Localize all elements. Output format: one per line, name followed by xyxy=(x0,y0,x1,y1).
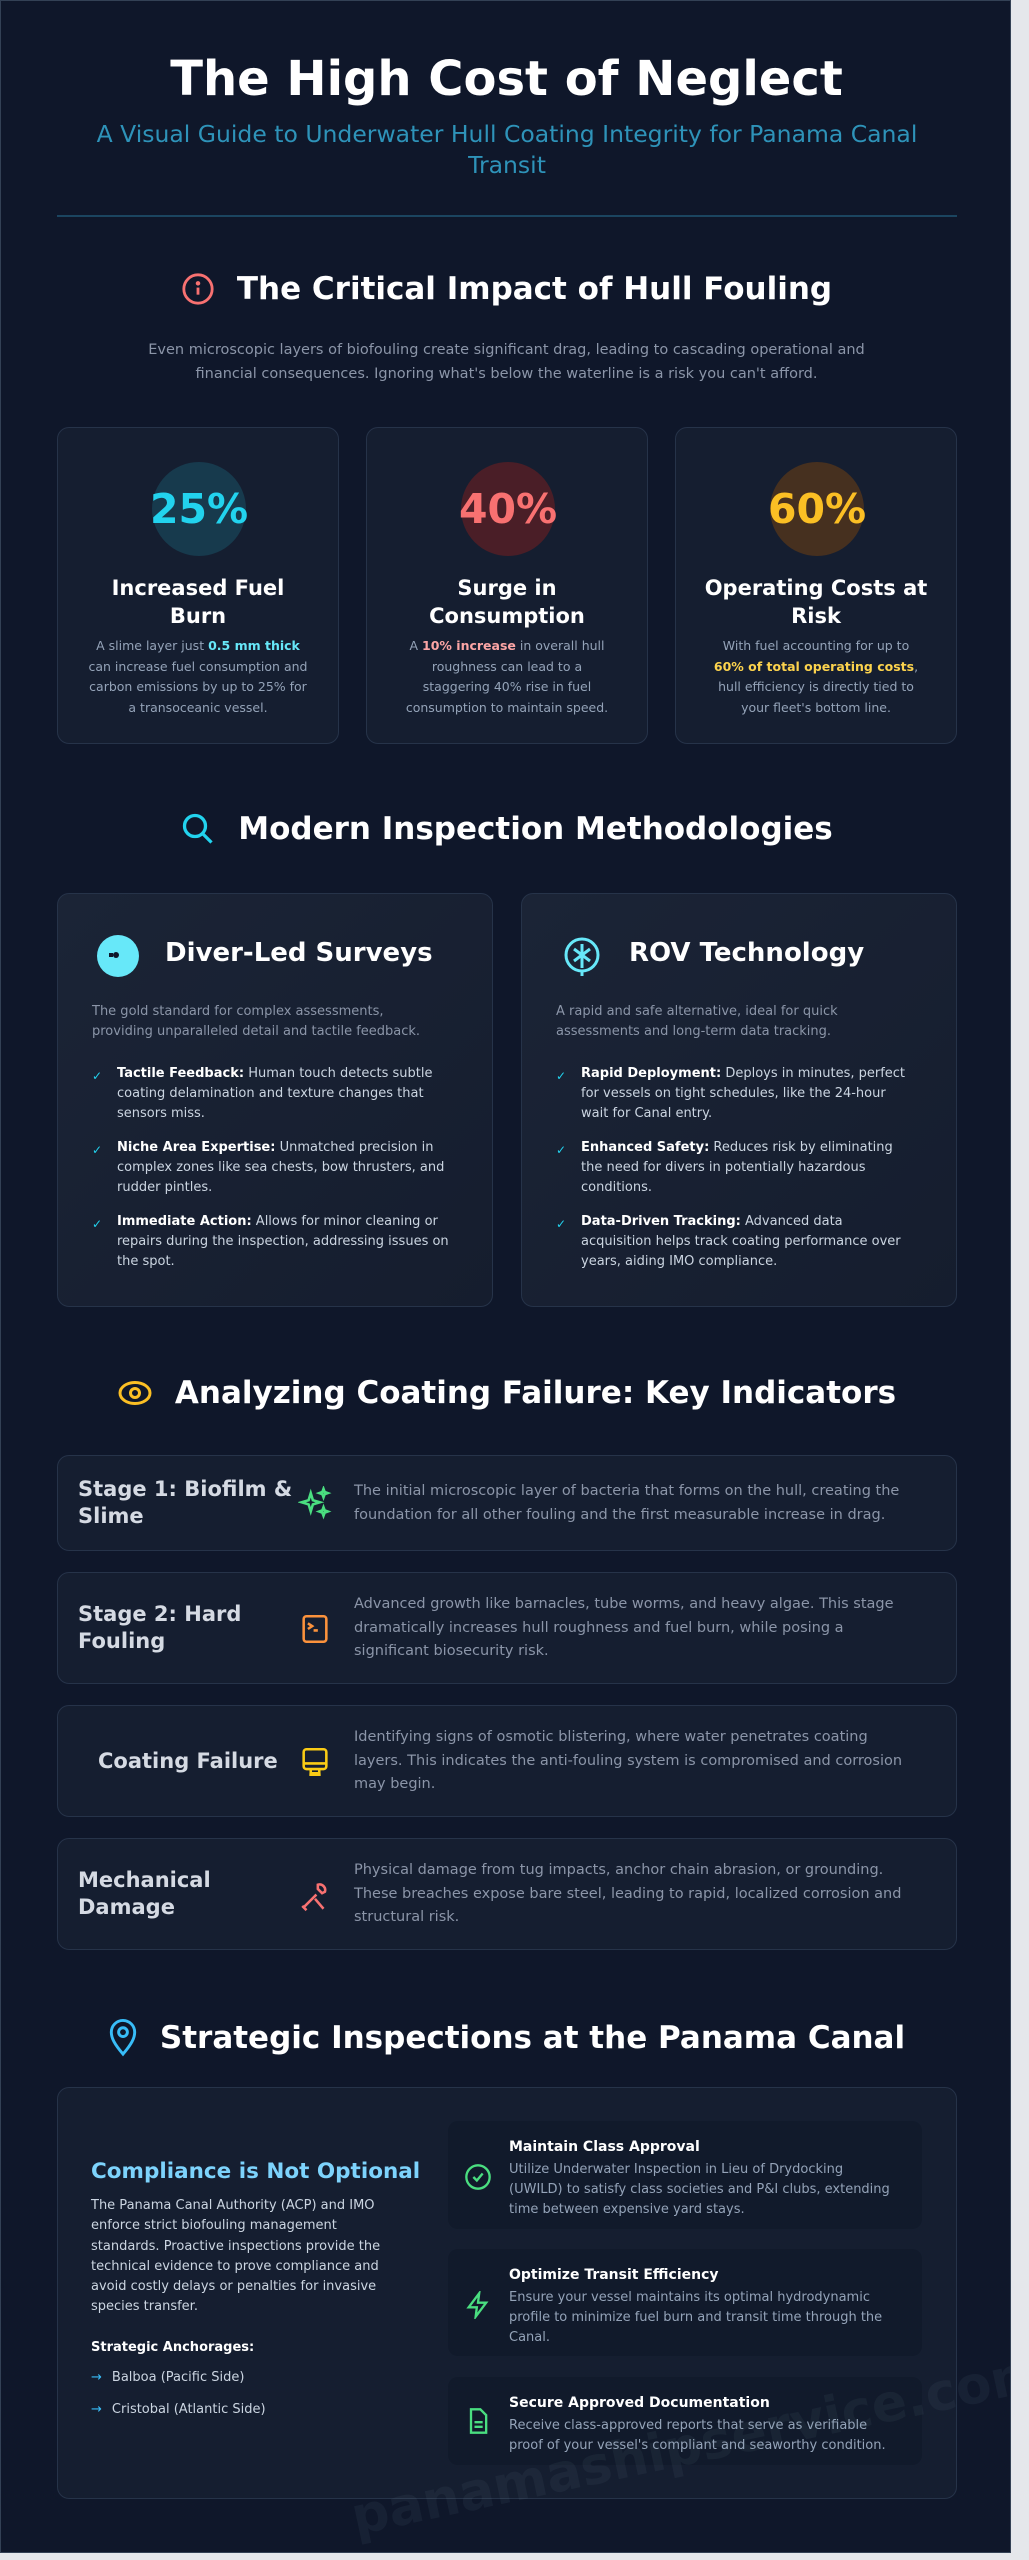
panel: ROV technology: ✓ xyxy=(556,1069,566,1083)
panel: diver-led surveys: ✓ xyxy=(92,1143,102,1157)
box: documentation: Receive class-approved reports that serve as verifiable proof of your vessel's compliant and seaworthy condition. xyxy=(509,2418,886,2453)
subtitle: A Visual Guide to Underwater Hull Coating Integrity for Panama Canal Transit xyxy=(97,120,917,179)
panel: ROV technology: Enhanced Safety: Reduces risk by eliminating the need for divers in potentially hazardous conditions. xyxy=(581,1140,893,1195)
panel: diver-led surveys xyxy=(57,893,493,1307)
compliance text block xyxy=(90,2159,420,2417)
stat card: 60%: 60% xyxy=(768,485,866,533)
stat card: 60%: With fuel accounting for up to 60% of total operating costs, hull efficiency is directly tied to your fleet's bottom line. xyxy=(714,638,918,714)
panel: ROV technology: A rapid and safe alternative, ideal for quick assessments and long-term data tracking. xyxy=(556,1004,838,1039)
compliance text block: The Panama Canal Authority (ACP) and IMO enforce strict biofouling management standards. Proactive inspections provide the technical evidence to prove compliance and avoid costly delays or penalties for invasive species transfer. xyxy=(91,2198,380,2314)
box: documentation xyxy=(448,2377,922,2465)
stat card: 60% xyxy=(675,427,957,744)
panel: ROV technology: ✓ xyxy=(556,1217,566,1231)
panel: diver-led surveys: Immediate Action: Allows for minor cleaning or repairs during the inspection, addressing issues on the spot. xyxy=(117,1214,449,1269)
box: transit efficiency: Ensure your vessel maintains its optimal hydrodynamic profile to minimize fuel burn and transit time through the Canal. xyxy=(509,2290,882,2345)
panel: diver-led surveys: Diver-Led Surveys xyxy=(165,938,433,968)
panel: ROV technology: ROV Technology xyxy=(629,938,864,968)
box: transit efficiency xyxy=(448,2249,922,2356)
box: class approval: Maintain Class Approval xyxy=(509,2139,700,2155)
row: mechanical damage: Mechanical Damage xyxy=(78,1868,211,1919)
compliance text block: Compliance is Not Optional xyxy=(91,2159,420,2184)
row: mechanical damage: Physical damage from tug impacts, anchor chain abrasion, or grounding. These breaches expose bare steel, leading to rapid, localized corrosion and structural risk. xyxy=(354,1862,901,1925)
stat card: 40% xyxy=(366,427,648,744)
panel: diver-led surveys: Tactile Feedback: Human touch detects subtle coating delamination and texture changes that sensors miss. xyxy=(117,1066,432,1121)
heading: coating failure: Analyzing Coating Failure: Key Indicators xyxy=(175,1375,896,1411)
panel: diver-led surveys: ✓ xyxy=(92,1217,102,1231)
row: stage 1: Stage 1: Biofilm & Slime xyxy=(78,1477,292,1528)
box: class approval: Utilize Underwater Inspection in Lieu of Drydocking (UWILD) to satisfy class societies and P&I clubs, extending time between expensive yard stays. xyxy=(509,2162,890,2217)
heading: critical impact: The Critical Impact of Hull Fouling xyxy=(237,271,832,307)
icon: ROV xyxy=(564,938,600,976)
row: coating failure: Coating Failure xyxy=(98,1749,278,1773)
row: mechanical damage xyxy=(57,1838,957,1950)
panel: ROV technology: Rapid Deployment: Deploys in minutes, perfect for vessels on tight schedules, like the 24-hour wait for Canal entry. xyxy=(581,1066,905,1121)
row: stage 1 xyxy=(57,1455,957,1551)
icon: monitor xyxy=(302,1748,328,1776)
stat card: 40%: A 10% increase in overall hull roughness can lead to a staggering 40% rise in fuel consumption to maintain speed. xyxy=(406,638,608,714)
panel: ROV technology: ✓ xyxy=(556,1143,566,1157)
panel: diver-led surveys: The gold standard for complex assessments, providing unparalleled detail and tactile feedback. xyxy=(92,1004,420,1039)
panel: ROV technology xyxy=(521,893,957,1307)
icon: wrench xyxy=(301,1883,326,1912)
row: coating failure: Identifying signs of osmotic blistering, where water penetrates coating layers. This indicates the anti-fouling system is compromised and corrosion may begin. xyxy=(354,1729,902,1792)
compliance text block: Strategic Anchorages: xyxy=(91,2340,254,2355)
stat card: 25%: Increased Fuel Burn xyxy=(112,576,284,628)
icon: terminal xyxy=(302,1615,328,1643)
panel: ROV technology: Data-Driven Tracking: Advanced data acquisition helps track coating performance over years, aiding IMO compliance. xyxy=(581,1214,901,1269)
compliance text block: → Cristobal (Atlantic Side) xyxy=(91,2402,266,2417)
stat card: 60%: Operating Costs at Risk xyxy=(705,576,927,628)
title: The High Cost of Neglect xyxy=(170,51,843,107)
icon: diver xyxy=(97,935,139,977)
row: coating failure xyxy=(57,1705,957,1817)
intro text: Even microscopic layers of biofouling create significant drag, leading to cascading operational and financial consequences. Ignoring what's below the waterline is a risk you can't afford. xyxy=(148,342,865,382)
compliance text block: → Balboa (Pacific Side) xyxy=(91,2370,244,2385)
stat card: 40%: Surge in Consumption xyxy=(429,576,585,628)
row: stage 1: The initial microscopic layer of bacteria that forms on the hull, creating the foundation for all other fouling and the first measurable increase in drag. xyxy=(354,1483,899,1522)
icon: sparkles xyxy=(298,1486,332,1520)
stat card: 25%: A slime layer just 0.5 mm thick can increase fuel consumption and carbon emissions by up to 25% for a transoceanic vessel. xyxy=(88,638,307,714)
box: transit efficiency: Optimize Transit Efficiency xyxy=(509,2267,719,2283)
heading: inspection methodologies: Modern Inspection Methodologies xyxy=(238,811,833,847)
box: documentation: Secure Approved Documentation xyxy=(509,2395,770,2411)
panel: diver-led surveys: ✓ xyxy=(92,1069,102,1083)
box: class approval xyxy=(448,2121,922,2229)
stat card: 25%: 25% xyxy=(150,485,248,533)
stat card: 25% xyxy=(57,427,339,744)
panel: compliance xyxy=(57,2087,957,2499)
row: stage 2: Stage 2: Hard Fouling xyxy=(78,1602,241,1653)
heading: panama canal: Strategic Inspections at the Panama Canal xyxy=(160,2020,905,2056)
row: stage 2: Advanced growth like barnacles, tube worms, and heavy algae. This stage dramatically increases hull roughness and fuel burn, while posing a significant biosecurity risk. xyxy=(354,1596,894,1659)
panel: diver-led surveys: Niche Area Expertise: Unmatched precision in complex zones like sea chests, bow thrusters, and rudder pintles. xyxy=(117,1140,444,1195)
row: stage 2 xyxy=(57,1572,957,1684)
stat card: 40%: 40% xyxy=(459,485,557,533)
